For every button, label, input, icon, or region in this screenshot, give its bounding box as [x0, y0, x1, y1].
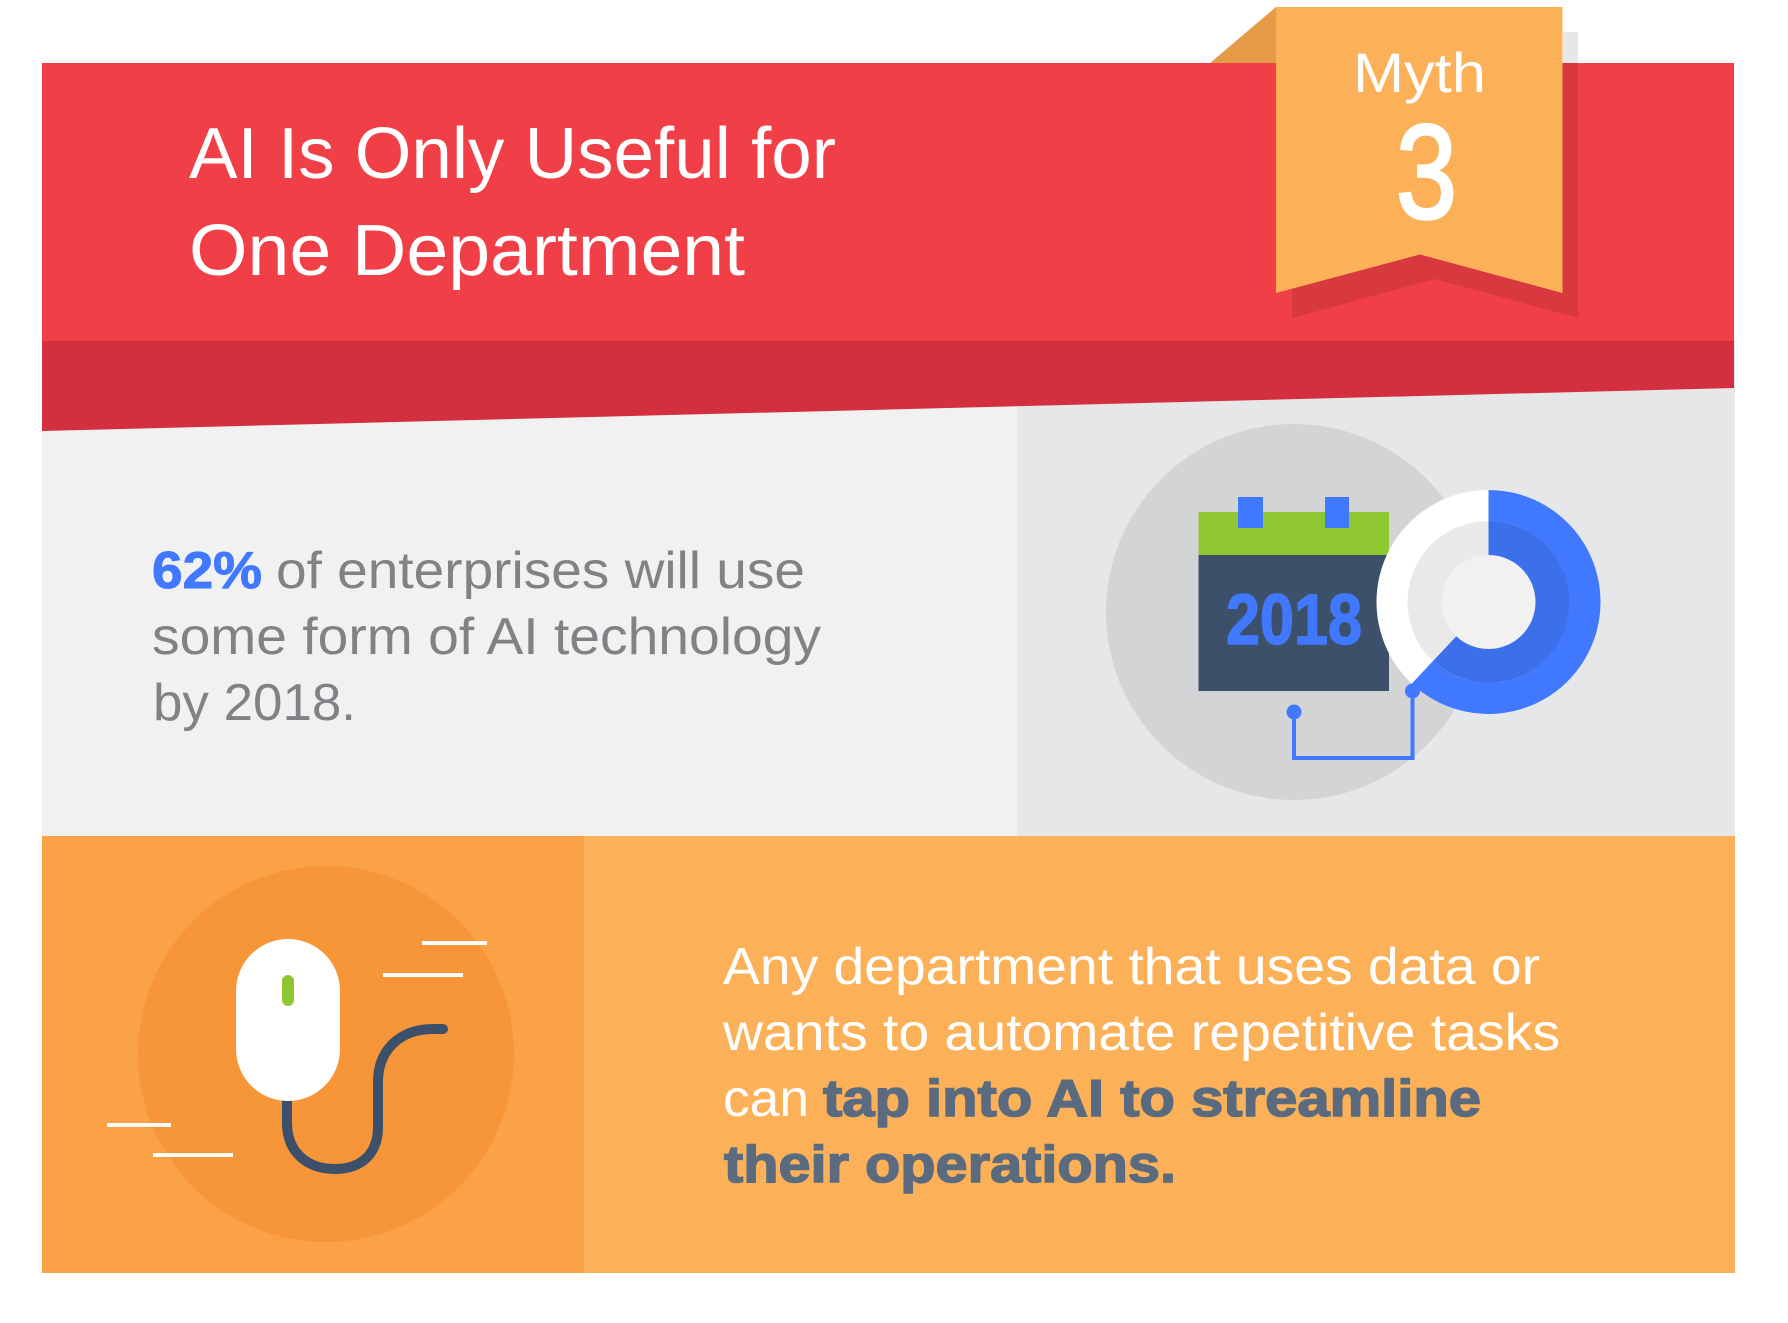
ribbon badge: Myth 3: Myth: [1353, 41, 1486, 104]
statistic text: [152, 542, 821, 732]
conclusion text: can: [723, 1070, 809, 1128]
title: One Department: [189, 211, 745, 291]
ribbon badge: Myth 3: 3: [1396, 98, 1457, 247]
panel: statistic background: [42, 340, 1017, 836]
ribbon badge: Myth 3: [1210, 7, 1578, 318]
statistic text: 62%: [152, 542, 262, 600]
conclusion text: tap into AI to streamline: [823, 1070, 1481, 1128]
panel: orange conclusion: [584, 836, 1735, 1273]
statistic text: by 2018.: [153, 674, 356, 732]
title: [189, 114, 836, 291]
panel: mouse illustration background: [42, 836, 584, 1273]
conclusion text: wants to automate repetitive tasks: [722, 1004, 1560, 1062]
statistic text: some form of AI technology: [152, 608, 821, 666]
conclusion text: Any department that uses data or: [723, 938, 1540, 996]
icon: calendar: [1198, 497, 1389, 691]
connector from calendar to donut: [1286, 684, 1420, 758]
statistic text: of enterprises will use: [276, 542, 805, 600]
title: AI Is Only Useful for: [189, 114, 836, 194]
conclusion text: their operations.: [724, 1136, 1176, 1194]
icon: calendar: 2018: [1226, 581, 1362, 660]
conclusion text: [722, 938, 1560, 1194]
illustration: computer mouse: [107, 866, 514, 1242]
panel: red header: [42, 63, 1734, 431]
panel: calendar illustration background: [1017, 340, 1735, 836]
illustration: calendar with donut chart: [1106, 424, 1601, 800]
donut chart: 62 percent: [1376, 490, 1601, 714]
